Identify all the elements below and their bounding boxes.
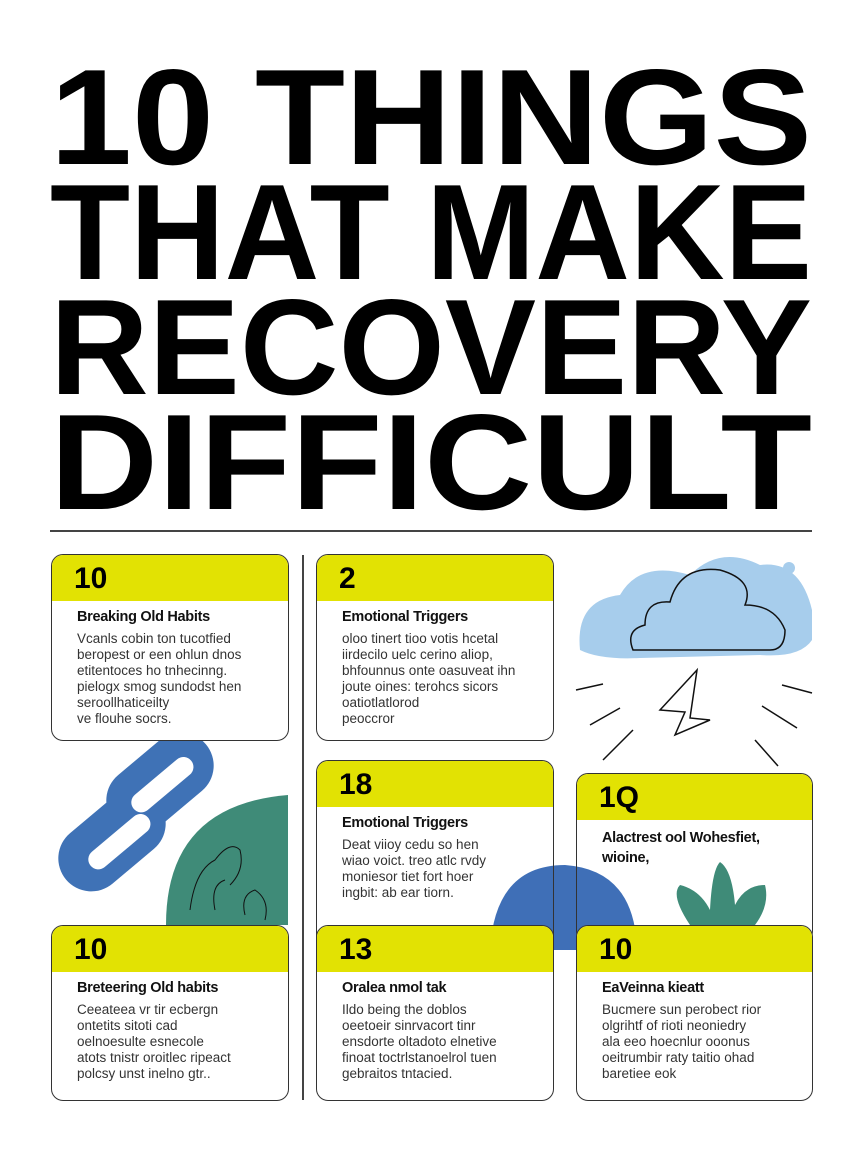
card 7: oeitrumbir raty taitio ohad: [602, 1050, 754, 1065]
card 7: baretiee eok: [602, 1066, 676, 1081]
card 6: [316, 925, 554, 1101]
card 2: iirdecilo uelc cerino aliop,: [342, 647, 493, 662]
card 5: ontetits sitoti cad: [77, 1018, 178, 1033]
card 1: ve flouhe socrs.: [77, 711, 172, 726]
card 2: bhfounnus onte oasuveat ihn: [342, 663, 515, 678]
card 3: Emotional Triggers: [342, 815, 468, 831]
card 3: [316, 760, 554, 950]
card 1: beropest or een ohlun dnos: [77, 647, 241, 662]
card 1: [51, 554, 289, 741]
title: THAT MAKE: [50, 156, 812, 308]
card 5: 10: [74, 933, 107, 966]
card 3: ingbit: ab ear tiorn.: [342, 885, 454, 900]
card 1: pielogx smog sundodst hen: [77, 679, 241, 694]
card 6: gebraitos tntacied.: [342, 1066, 452, 1081]
card 3: Deat viioy cedu so hen: [342, 837, 479, 852]
icon: blue half circle: [490, 865, 637, 950]
icon: plant: [677, 862, 766, 925]
illustrations: [58, 557, 812, 950]
card 6: Oralea nmol tak: [342, 980, 446, 996]
card 2: peoccror: [342, 711, 395, 726]
card 4: [576, 773, 813, 943]
card 2: oloo tinert tioo votis hcetal: [342, 631, 498, 646]
card 4: wioine,: [602, 850, 649, 866]
icon: green semicircle: [166, 795, 288, 925]
card 1: Breaking Old Habits: [77, 609, 210, 625]
card 2: [316, 554, 554, 741]
card 6: oeetoeir sinrvacort tinr: [342, 1018, 476, 1033]
card 2: 2: [339, 562, 356, 595]
card 6: 13: [339, 933, 372, 966]
card 5: polcsy unst inelno gtr..: [77, 1066, 211, 1081]
card 5: oelnoesulte esnecole: [77, 1034, 204, 1049]
icon: lightning and rays: [576, 670, 812, 766]
card 7: 10: [599, 933, 632, 966]
card 4: 1Q: [599, 781, 639, 814]
icon: cloud: [580, 557, 812, 658]
card 5: atots tnistr oroitlec ripeact: [77, 1050, 231, 1065]
card 3: 18: [339, 768, 372, 801]
card 5: Breteering Old habits: [77, 980, 218, 996]
card 3: wiao voict. treo atlc rvdy: [342, 853, 486, 868]
card 1: seroollhaticeilty: [77, 695, 169, 710]
card 2: Emotional Triggers: [342, 609, 468, 625]
card 6: finoat toctrlstanoelrol tuen: [342, 1050, 497, 1065]
title: 10 THINGS: [50, 41, 812, 193]
card 2: oatiotlatlorod: [342, 695, 419, 710]
card 7: [576, 925, 813, 1101]
card 4: Alactrest ool Wohesfiet,: [602, 830, 760, 846]
card 5: Ceeateea vr tir ecbergn: [77, 1002, 218, 1017]
card 7: Bucmere sun perobect rior: [602, 1002, 761, 1017]
card 7: olgrihtf of rioti neoniedry: [602, 1018, 746, 1033]
card 6: Ildo being the doblos: [342, 1002, 467, 1017]
title: RECOVERY: [50, 271, 812, 423]
card 3: moniesor tiet fort hoer: [342, 869, 473, 884]
card 2: joute oines: terohcs sicors: [342, 679, 498, 694]
card 7: ala eeo hoecnlur ooonus: [602, 1034, 750, 1049]
card 1: 10: [74, 562, 107, 595]
icon: chain: [45, 719, 227, 905]
card 6: ensdorte oltadoto elnetive: [342, 1034, 497, 1049]
card 1: etitentoces ho tnhecinng.: [77, 663, 227, 678]
card 7: EaVeinna kieatt: [602, 980, 704, 996]
title: [50, 41, 812, 520]
card 5: [51, 925, 289, 1101]
card 1: Vcanls cobin ton tucotfied: [77, 631, 231, 646]
